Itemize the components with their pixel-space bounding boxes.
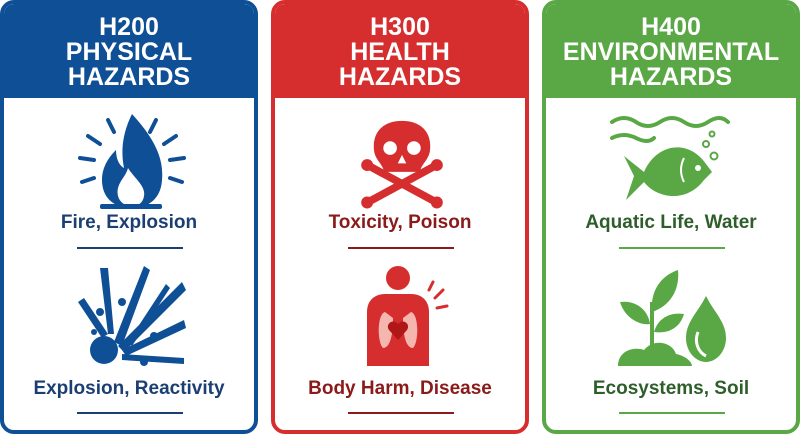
- header: H400: HAZARDS: [610, 63, 732, 91]
- header: H300: H300: [370, 13, 430, 41]
- header: H200: H200: [99, 13, 159, 41]
- icon: body with heart: [367, 266, 448, 366]
- header: H300: HAZARDS: [339, 63, 461, 91]
- header: H200: PHYSICAL: [66, 38, 192, 66]
- label: Toxicity, Poison: Toxicity, Poison: [329, 212, 471, 233]
- header: H200: HAZARDS: [68, 63, 190, 91]
- panel: environmental hazards: [542, 0, 800, 434]
- panel: physical hazards: [0, 0, 258, 434]
- label: Fire, Explosion: Fire, Explosion: [61, 212, 197, 233]
- header: H400: ENVIRONMENTAL: [563, 38, 779, 66]
- header: H400: [546, 4, 796, 98]
- label: Body Harm, Disease: Body Harm, Disease: [308, 378, 492, 399]
- icon: fish in water: [610, 116, 730, 200]
- icon: skull and crossbones: [361, 120, 443, 208]
- icon: plant and droplet: [618, 270, 726, 366]
- label: Explosion, Reactivity: Explosion, Reactivity: [33, 378, 225, 399]
- panel: health hazards: [271, 0, 529, 434]
- label: Ecosystems, Soil: Ecosystems, Soil: [593, 378, 749, 399]
- header: H300: HEALTH: [350, 38, 450, 66]
- header: H300: [275, 4, 525, 98]
- icon: explosion: [78, 266, 186, 366]
- label: Aquatic Life, Water: Aquatic Life, Water: [585, 212, 757, 233]
- header: H200: [4, 4, 254, 98]
- icon: flame: [78, 114, 186, 209]
- header: H400: H400: [641, 13, 701, 41]
